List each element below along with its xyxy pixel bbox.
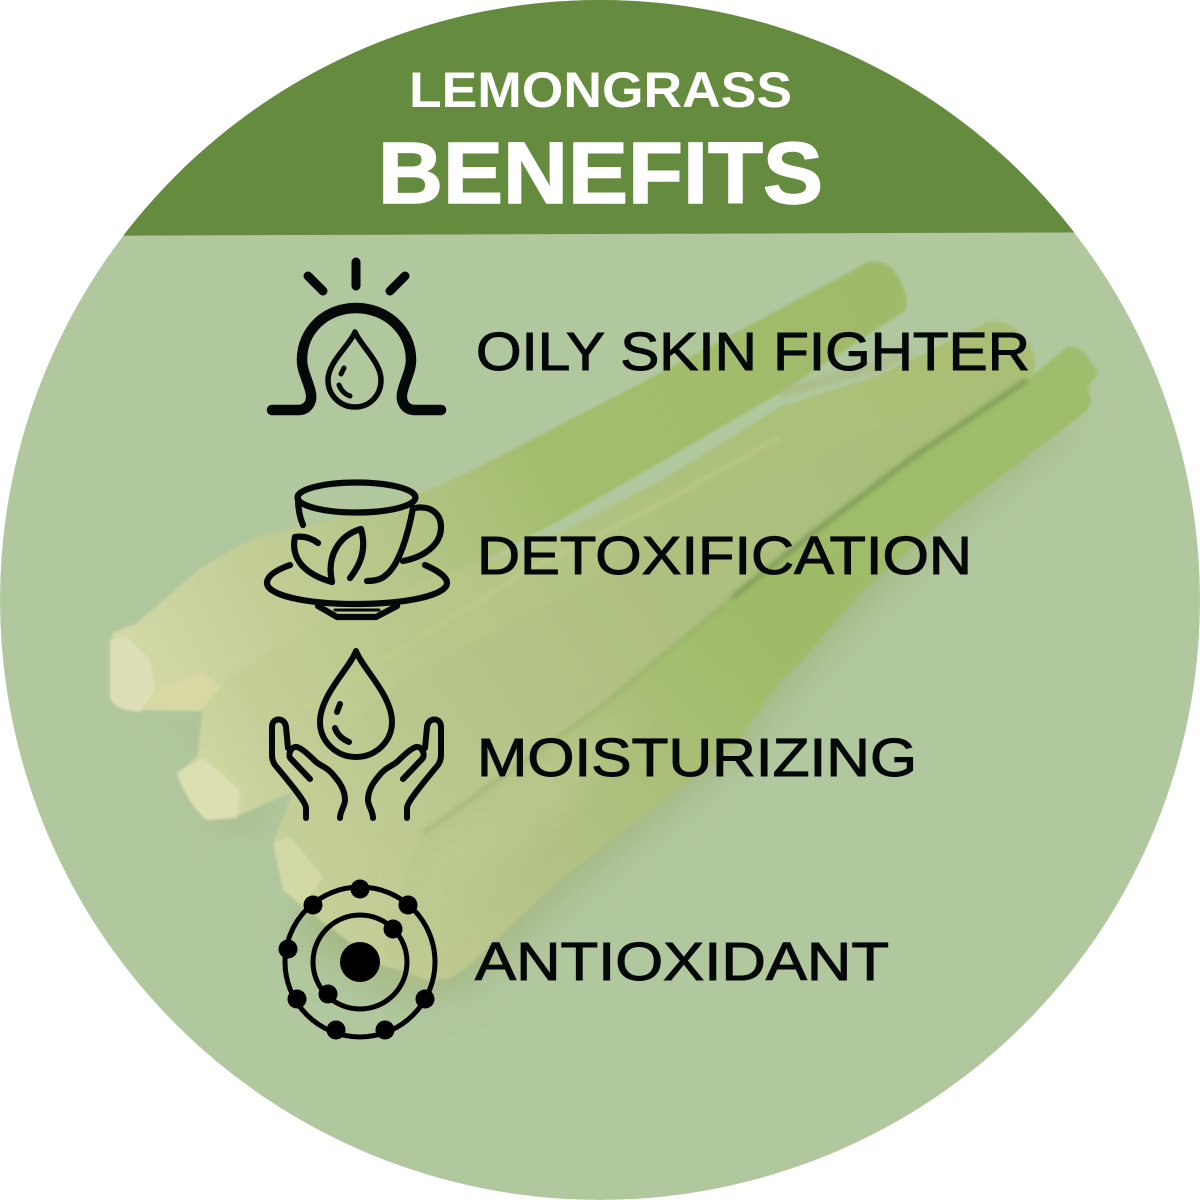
icon: atom bbox=[278, 880, 435, 1040]
photo: lemongrass stalks bbox=[110, 261, 1098, 1000]
icon: tea cup with leaves bbox=[267, 482, 447, 617]
panel: header band bbox=[123, 0, 1074, 236]
title bbox=[378, 62, 823, 222]
icon: hands holding drop bbox=[272, 651, 441, 818]
middle stalk bbox=[177, 321, 1035, 850]
soft pale front of outer stalk bbox=[506, 732, 606, 817]
label: antioxidant: ANTIOXIDANT bbox=[475, 932, 889, 992]
stalk three outer part bbox=[384, 347, 1098, 980]
title line: lemongrass: LEMONGRASS bbox=[409, 62, 792, 118]
icon: oily skin bbox=[272, 262, 441, 410]
title line: benefits: BENEFITS bbox=[378, 125, 823, 222]
label: moisturizing: MOISTURIZING bbox=[477, 728, 917, 788]
label: detoxification: DETOXIFICATION bbox=[477, 526, 972, 586]
label: oily skin fighter: OILY SKIN FIGHTER bbox=[476, 322, 1030, 382]
stalk three inner part bbox=[274, 795, 416, 970]
pale ridge lines and groove bbox=[423, 348, 1028, 834]
back stalk bbox=[110, 261, 906, 711]
